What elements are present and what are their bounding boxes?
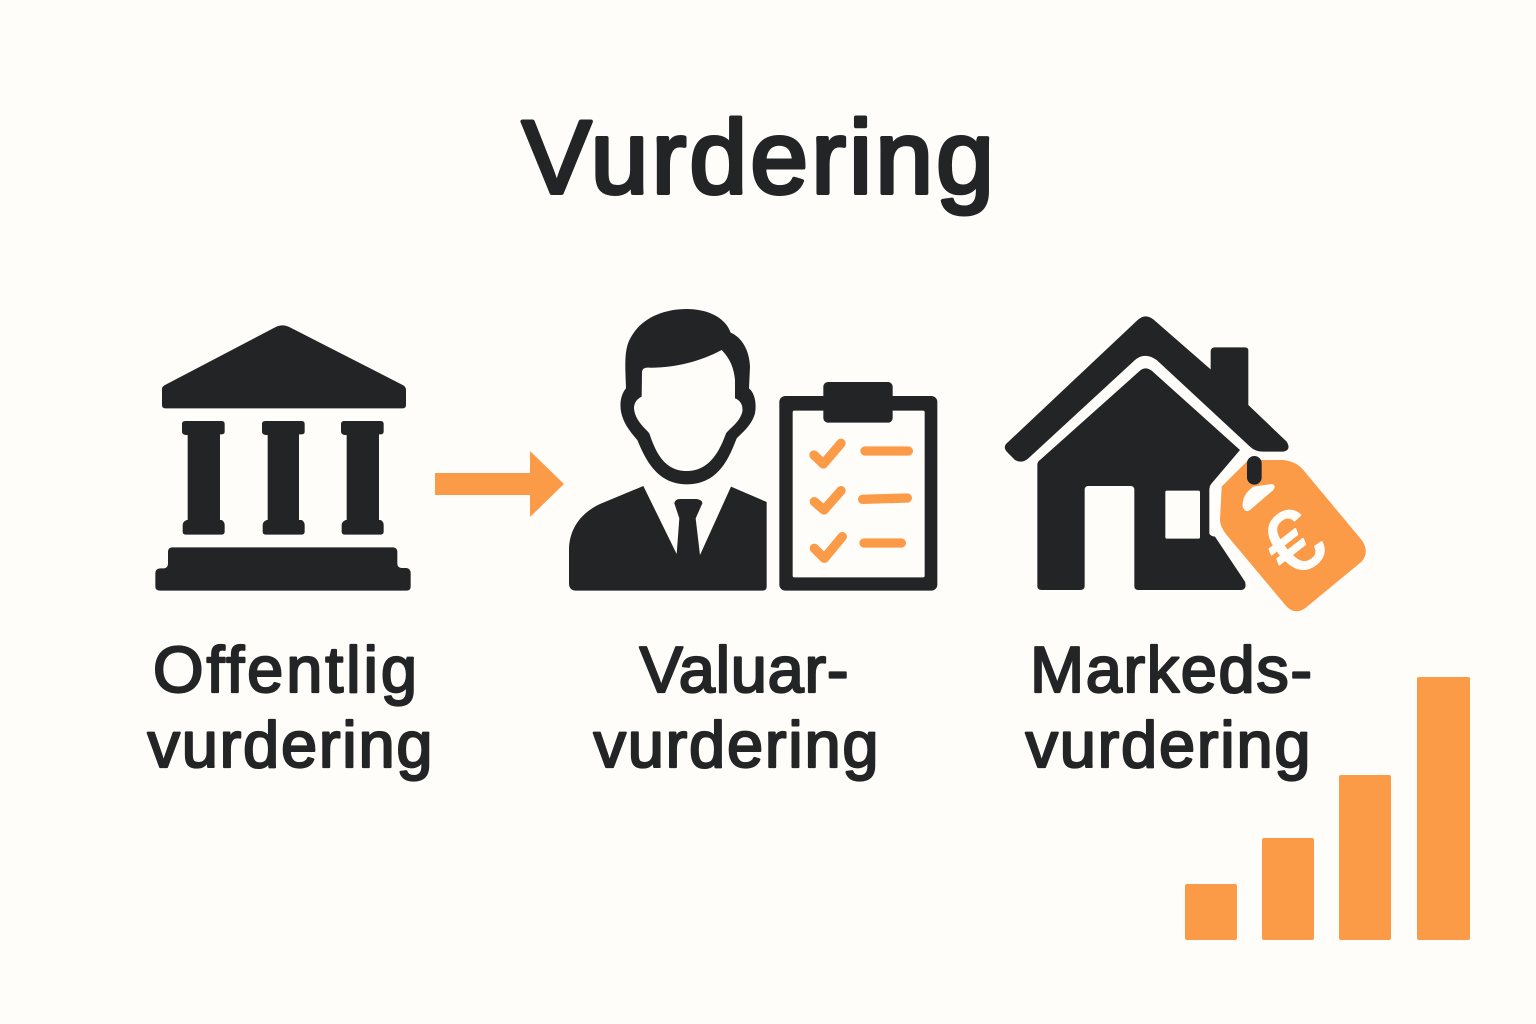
label: valuar-vurdering: Valuar- xyxy=(640,633,848,706)
bar chart xyxy=(1185,677,1470,940)
arrow xyxy=(435,451,564,517)
title: Vurdering xyxy=(522,100,994,216)
label: offentlig vurdering xyxy=(148,633,432,781)
label: valuar-vurdering xyxy=(594,633,878,781)
icon: price tag: € xyxy=(1243,489,1342,597)
icon: valuer with clipboard xyxy=(569,309,937,591)
icon: house with price tag xyxy=(1005,316,1366,611)
icon: valuer xyxy=(569,309,767,591)
label: markeds-vurdering: vurdering xyxy=(1026,708,1310,781)
icon: house xyxy=(1005,316,1289,590)
icon: price tag xyxy=(1220,456,1366,611)
label: markeds-vurdering: Markeds- xyxy=(1030,633,1312,706)
label: offentlig vurdering: Offentlig xyxy=(153,633,417,706)
label: offentlig vurdering: vurdering xyxy=(148,708,432,781)
icon: clipboard checklist xyxy=(779,382,937,591)
label: markeds-vurdering xyxy=(1026,633,1312,781)
icon: public building xyxy=(155,325,411,591)
label: valuar-vurdering: vurdering xyxy=(594,708,878,781)
